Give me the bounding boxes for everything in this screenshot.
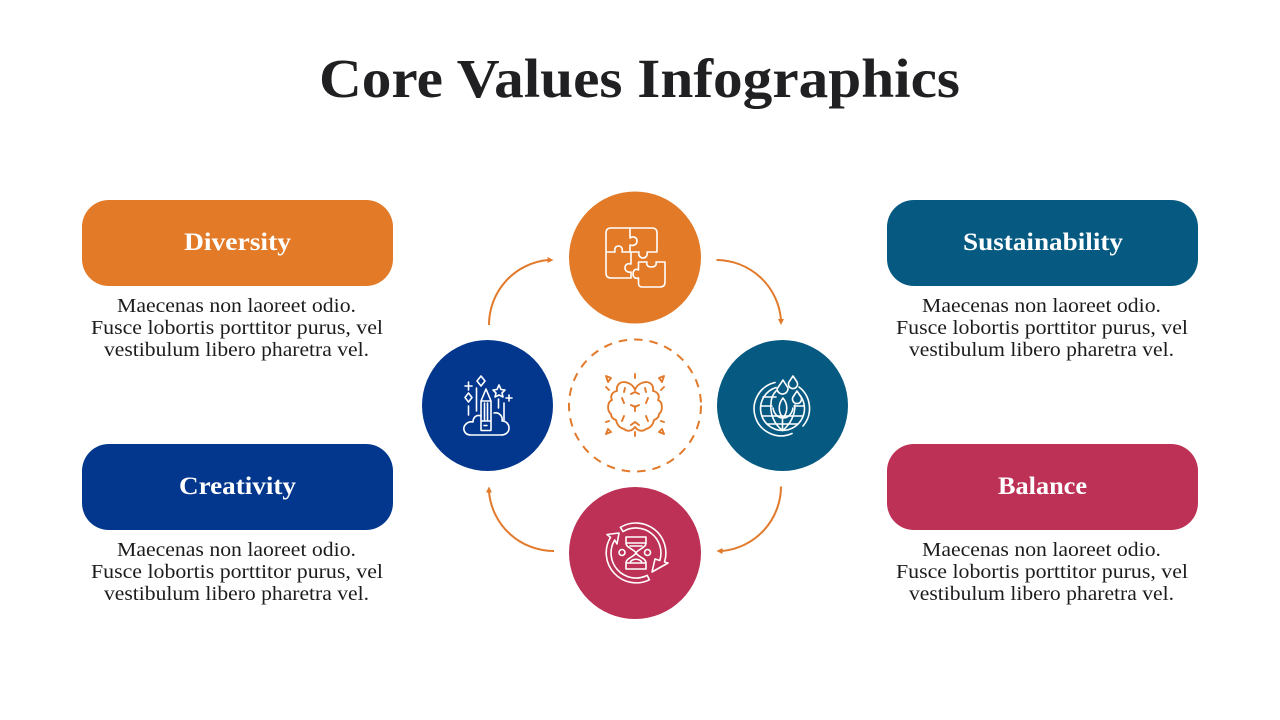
creativity heading: Creativity	[179, 473, 297, 500]
creativity label box	[82, 444, 393, 530]
diversity label box	[82, 200, 393, 286]
balance heading: Balance	[998, 473, 1087, 500]
icon: brain in dashed circle	[569, 340, 701, 472]
panel: balance	[887, 444, 1198, 605]
icon: hourglass and cycle on red circle	[569, 487, 701, 619]
arrow: bottom to left	[486, 486, 554, 551]
icon: globe and drops on teal circle	[717, 340, 848, 471]
panel: diversity	[82, 200, 393, 361]
balance text: Fusce lobortis porttitor purus, vel	[896, 561, 1188, 583]
diversity text	[91, 295, 383, 361]
title: Core Values Infographics	[319, 48, 960, 109]
arrow: top to right	[716, 260, 784, 325]
creativity text: Maecenas non laoreet odio.	[117, 539, 356, 561]
sustainability text: vestibulum libero pharetra vel.	[909, 339, 1174, 361]
sustainability text: Maecenas non laoreet odio.	[922, 295, 1161, 317]
icon: puzzle on orange circle	[569, 192, 701, 324]
panel: sustainability	[887, 200, 1198, 361]
sustainability label box	[887, 200, 1198, 286]
balance text	[896, 539, 1188, 605]
balance label box	[887, 444, 1198, 530]
arrow: right to bottom	[716, 486, 781, 554]
creativity text: Fusce lobortis porttitor purus, vel	[91, 561, 383, 583]
arrow: left to top	[489, 257, 554, 325]
diversity text: Maecenas non laoreet odio.	[117, 295, 356, 317]
creativity text	[91, 539, 383, 605]
creativity text: vestibulum libero pharetra vel.	[104, 583, 369, 605]
sustainability text	[896, 295, 1188, 361]
sustainability text: Fusce lobortis porttitor purus, vel	[896, 317, 1188, 339]
balance text: vestibulum libero pharetra vel.	[909, 583, 1174, 605]
sustainability heading: Sustainability	[963, 229, 1124, 256]
panel: creativity	[82, 444, 393, 605]
balance text: Maecenas non laoreet odio.	[922, 539, 1161, 561]
icon: pencil and cloud on blue circle	[422, 340, 553, 471]
diversity text: vestibulum libero pharetra vel.	[104, 339, 369, 361]
diversity heading: Diversity	[184, 229, 292, 256]
diversity text: Fusce lobortis porttitor purus, vel	[91, 317, 383, 339]
